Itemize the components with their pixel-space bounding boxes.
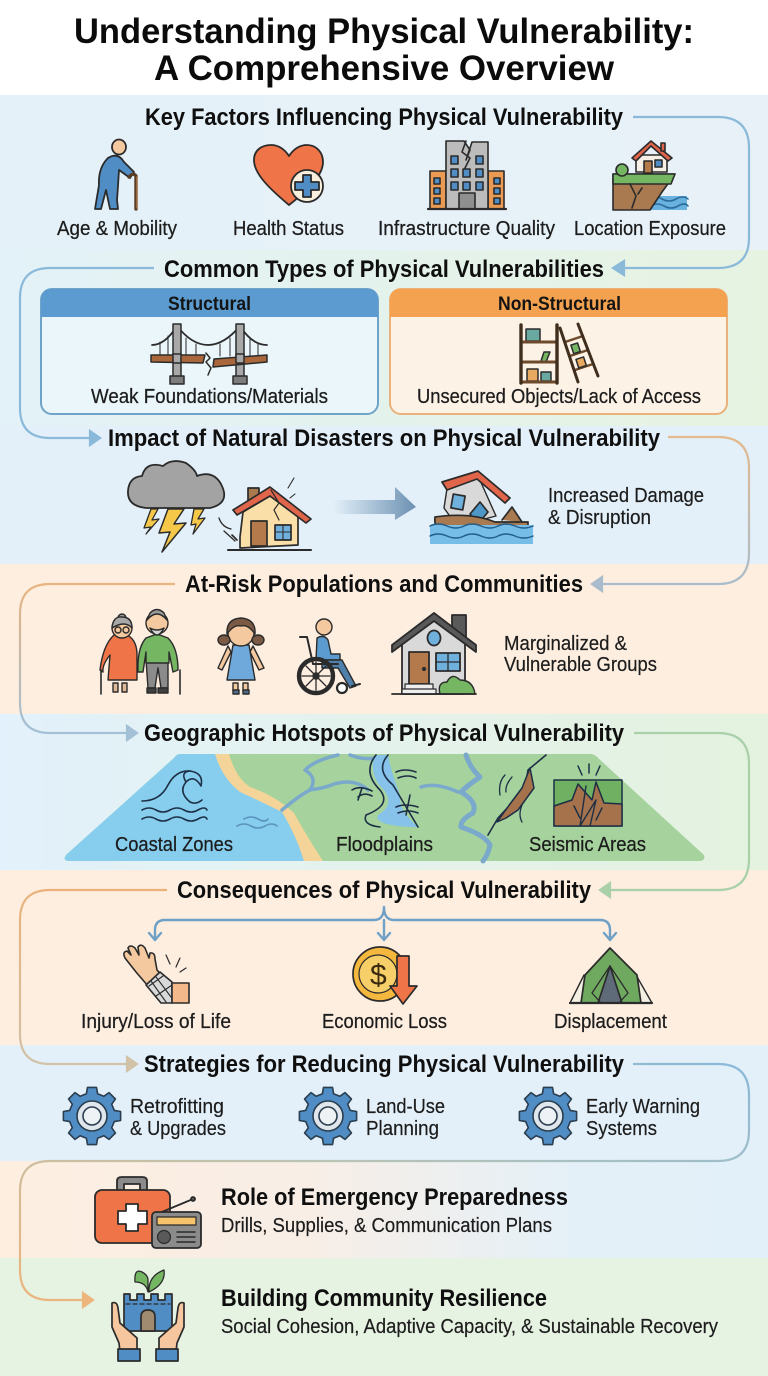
arrow: key factors to common types (613, 117, 749, 275)
map: hotspot terrain (65, 754, 704, 861)
panel: at-risk populations (100, 571, 657, 694)
title (74, 12, 694, 88)
heading: consequences: Consequences of Physical Vulnerability (177, 877, 592, 904)
text: retrofitting: Retrofitting (130, 1096, 224, 1118)
panel: community resilience (112, 1270, 718, 1361)
text: retrofitting (130, 1096, 226, 1140)
arrow: impact to at-risk (592, 437, 749, 591)
panel: consequences (81, 877, 667, 1033)
arrow: common types to impact (20, 268, 154, 445)
arrow: consequences to strategies (20, 890, 167, 1071)
text: early warning: Systems (586, 1118, 657, 1140)
panel: strategies (63, 1051, 700, 1145)
text: land-use: Planning (366, 1118, 439, 1140)
icon: house on cliff (613, 141, 688, 210)
panel: key factors (57, 104, 726, 240)
icon: house (392, 613, 476, 694)
label: seismic areas: Seismic Areas (529, 834, 646, 856)
title: A Comprehensive Overview (154, 49, 615, 88)
icon: damaged house (219, 478, 311, 550)
label: unsecured objects: Unsecured Objects/Lack of Access (417, 386, 701, 408)
branching arrows (149, 907, 616, 940)
icon: storm cloud with lightning (128, 461, 224, 552)
title: Understanding Physical Vulnerability: (74, 12, 694, 51)
label: infrastructure quality: Infrastructure Quality (378, 218, 555, 240)
card: structural (41, 289, 378, 414)
icon: person in wheelchair (299, 619, 360, 693)
label: displacement: Displacement (554, 1011, 667, 1033)
arrow: hotspots to consequences (600, 733, 749, 897)
arrow: damage progression (333, 487, 416, 520)
label: economic loss: Economic Loss (322, 1011, 447, 1033)
label: age and mobility: Age & Mobility (57, 218, 177, 240)
label: health status: Health Status (233, 218, 344, 240)
icon: coin with down arrow (353, 947, 417, 1004)
panel: natural disasters (108, 425, 704, 552)
text: increased damage: Increased Damage (548, 485, 704, 507)
label: coastal zones: Coastal Zones (115, 834, 233, 856)
icon: elderly couple (100, 610, 180, 694)
arrow: at-risk to hotspots (20, 584, 175, 740)
heading: emergency preparedness: Role of Emergency Preparedness (221, 1184, 568, 1211)
heading: community resilience: Building Community Resilience (221, 1285, 547, 1312)
panel: common types (41, 256, 727, 414)
panel: emergency preparedness (95, 1177, 568, 1248)
text: drills: Drills, Supplies, & Communication Plans (221, 1215, 552, 1237)
text: marginalized groups (504, 633, 657, 676)
text: social cohesion: Social Cohesion, Adaptive Capacity, & Sustainable Recovery (221, 1316, 718, 1338)
icon: floodplain river (352, 755, 418, 827)
icon: gear two (299, 1087, 357, 1145)
heading: impact: Impact of Natural Disasters on Physical Vulnerability (108, 425, 661, 452)
icon: elderly person with cane (95, 140, 137, 209)
icon: child (218, 618, 264, 694)
text: retrofitting: & Upgrades (130, 1118, 226, 1140)
icon: broken bridge (151, 324, 267, 384)
heading: at-risk: At-Risk Populations and Communities (185, 571, 583, 598)
icon: ocean wave (142, 771, 277, 828)
text: land-use: Land-Use (366, 1096, 445, 1118)
text: early warning (586, 1096, 700, 1140)
text: increased damage (548, 485, 704, 529)
icon: gear one (63, 1087, 121, 1145)
icon: flooded house (430, 471, 533, 544)
heading: hotspots: Geographic Hotspots of Physical Vulnerability (144, 720, 625, 747)
heading: key factors: Key Factors Influencing Physical Vulnerability (145, 104, 624, 131)
label: injury: Injury/Loss of Life (81, 1011, 231, 1033)
card: non-structural (390, 289, 727, 414)
panel: geographic hotspots (65, 720, 704, 861)
icon: seismic crack box (554, 764, 622, 826)
card title: non-structural: Non-Structural (498, 294, 621, 315)
icon: gear three (519, 1087, 577, 1145)
heading: common types: Common Types of Physical Vulnerabilities (164, 256, 604, 283)
label: weak foundations: Weak Foundations/Materials (91, 386, 328, 408)
icon: cracked building (428, 141, 506, 209)
icon: coin with down arrow: $ (370, 959, 387, 992)
text: early warning: Early Warning (586, 1096, 700, 1118)
icon: fault line (488, 755, 546, 835)
text: marginalized groups: Vulnerable Groups (504, 654, 657, 676)
icon: heart with medical badge (254, 145, 323, 205)
icon: tent (570, 948, 652, 1003)
text: land-use (366, 1096, 445, 1140)
text: increased damage: & Disruption (548, 507, 651, 529)
icon: injured hand (124, 945, 189, 1003)
icon: hands holding castle and sprout (112, 1270, 184, 1361)
icon: toppled shelf and ladder (521, 324, 598, 383)
label: location exposure: Location Exposure (574, 218, 726, 240)
label: floodplains: Floodplains (336, 834, 433, 856)
heading: strategies: Strategies for Reducing Physical Vulnerability (144, 1051, 625, 1078)
arrow: strategies to resilience (20, 1064, 749, 1307)
card title: structural: Structural (168, 294, 251, 315)
icon: first aid kit and radio (95, 1177, 201, 1248)
text: marginalized groups: Marginalized & (504, 633, 628, 655)
